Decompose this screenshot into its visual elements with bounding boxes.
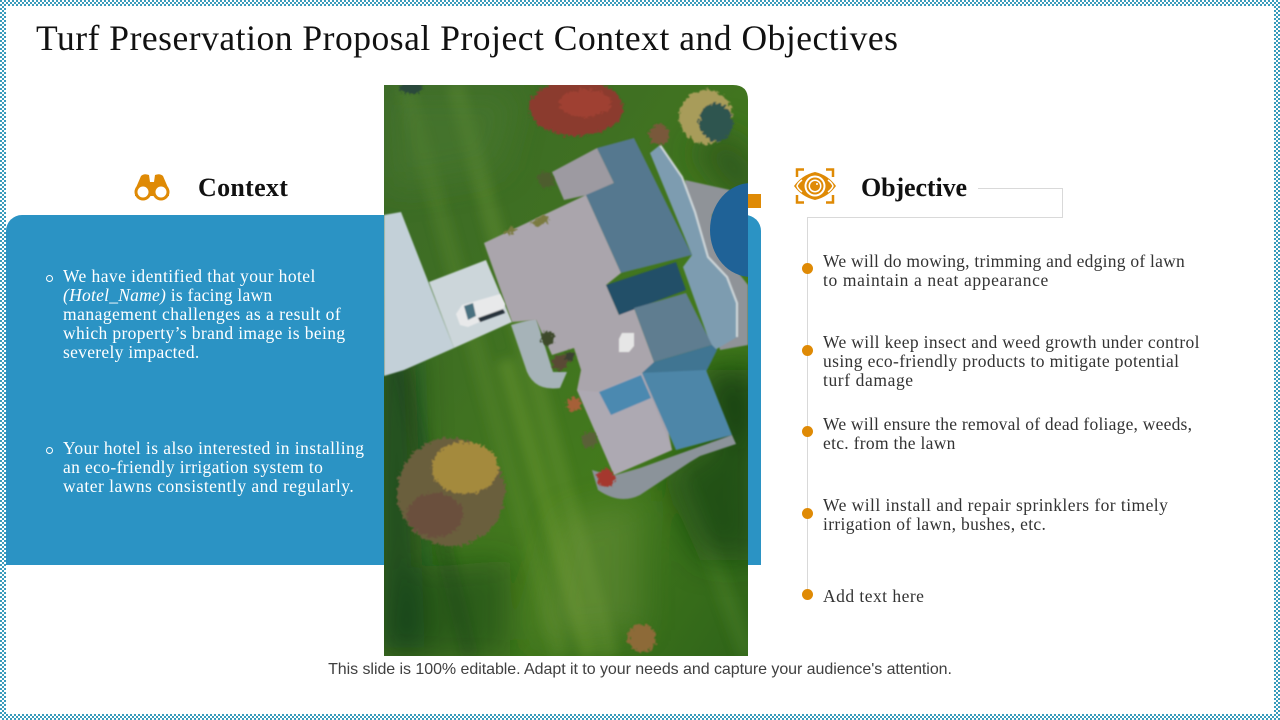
objective item 3: etc. from the lawn	[823, 433, 956, 453]
house roof	[484, 138, 748, 499]
context text block: (Hotel_Name) is facing lawn	[63, 285, 272, 305]
bullet	[46, 447, 53, 454]
objective item 3: We will ensure the removal of dead foliage, weeds,	[823, 414, 1192, 434]
lawn shadows and highlights	[375, 90, 760, 660]
panel: objective accent background	[720, 215, 761, 565]
driveway	[384, 212, 567, 389]
footer note: This slide is 100% editable. Adapt it to your needs and capture your audience's attention.	[328, 661, 952, 678]
objective item 2: We will keep insect and weed growth under control	[823, 332, 1200, 352]
context text block: an eco-friendly irrigation system to	[63, 457, 323, 477]
aerial photo of house and lawn	[384, 85, 748, 656]
title: Turf Preservation Proposal Project Context and Objectives	[36, 18, 898, 58]
objective item 1: to maintain a neat appearance	[823, 270, 1049, 290]
context text block: We have identified that your hotel	[63, 266, 316, 286]
objective item 2: using eco-friendly products to mitigate potential	[823, 351, 1179, 371]
car	[456, 294, 505, 327]
context text block: severely impacted.	[63, 342, 200, 362]
heading: context: Context	[198, 173, 288, 202]
objective item 1: We will do mowing, trimming and edging of lawn	[823, 251, 1185, 271]
objective item 4: We will install and repair sprinklers for timely	[823, 495, 1168, 515]
objective item 2	[802, 332, 1200, 390]
context text block: which property’s brand image is being	[63, 323, 345, 343]
icon: binoculars	[134, 174, 170, 200]
context text block	[46, 266, 364, 496]
objective item 1	[802, 251, 1185, 290]
context text block: Your hotel is also interested in installing	[63, 438, 364, 458]
orange accent square	[740, 194, 761, 208]
panel: context background	[6, 215, 406, 565]
heading: objective: Objective	[861, 173, 967, 202]
context text block: water lawns consistently and regularly.	[63, 476, 354, 496]
bullet	[46, 275, 53, 282]
objective item 3	[802, 414, 1192, 453]
pool	[710, 183, 748, 277]
objective item 2: turf damage	[823, 370, 914, 390]
connector lines	[807, 188, 1063, 589]
trees	[397, 80, 733, 652]
mowing stripes on lawn	[384, 85, 748, 656]
icon: eye target	[794, 168, 836, 204]
objective item 5: Add text here	[823, 586, 924, 606]
context text block: management challenges as a result of	[63, 304, 341, 324]
objective item 4	[802, 495, 1168, 534]
objective item 4: irrigation of lawn, bushes, etc.	[823, 514, 1046, 534]
